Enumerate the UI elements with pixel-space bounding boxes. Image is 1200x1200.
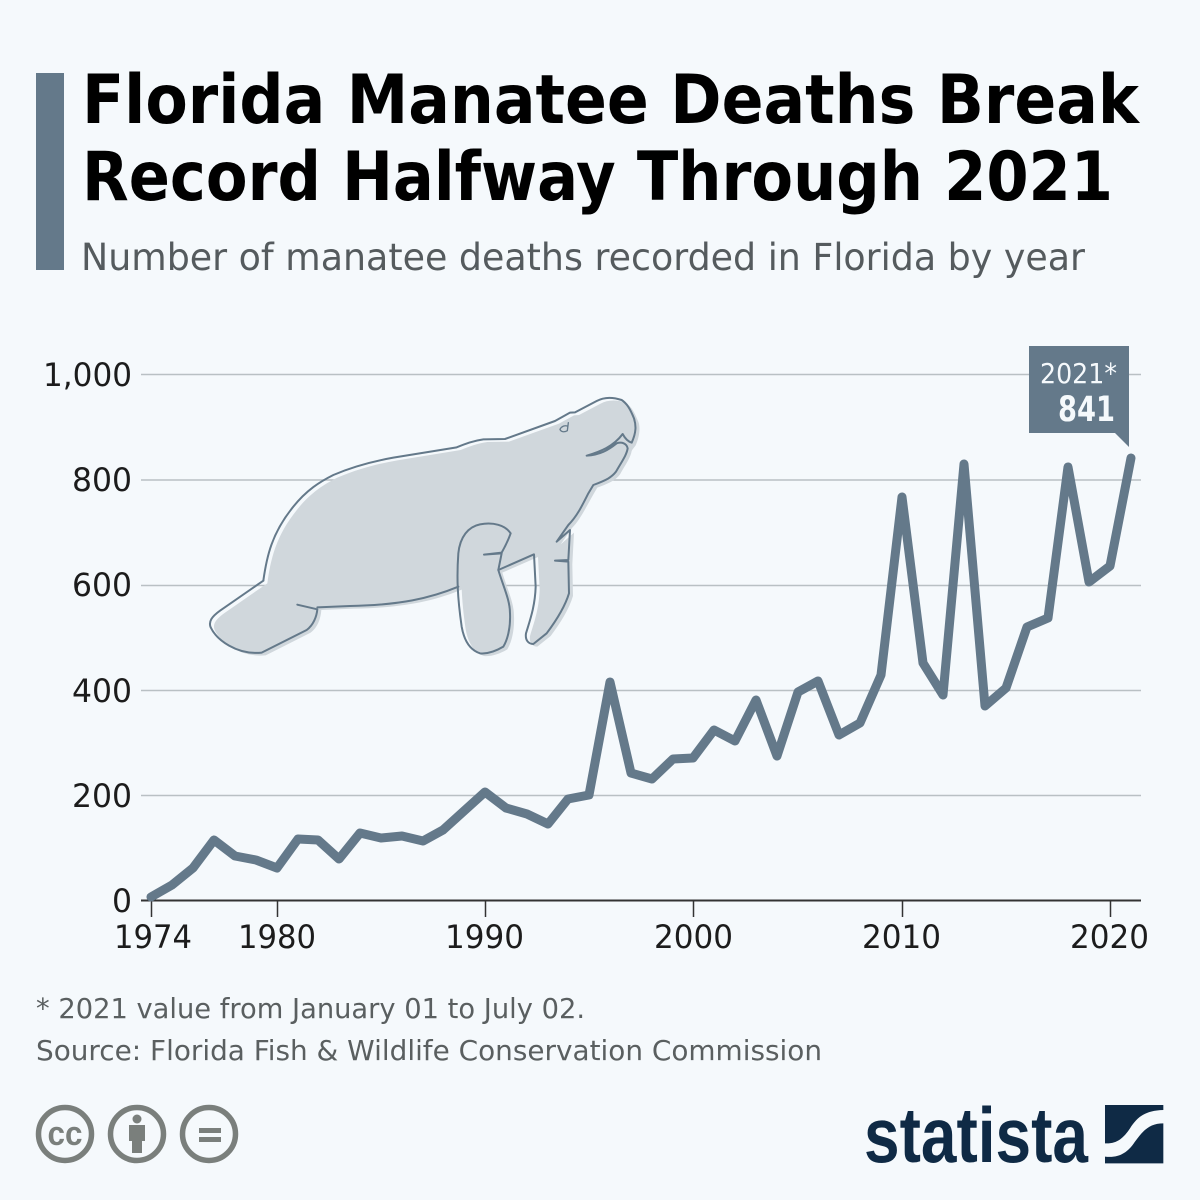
x axis labels: 2000: [654, 918, 733, 956]
y axis labels: 400: [72, 672, 132, 710]
callout: 2021 value: [1029, 346, 1129, 447]
callout: 2021 value: 841: [1058, 390, 1115, 430]
y axis labels: 800: [72, 461, 132, 499]
icon: creative commons licence: [38, 1108, 236, 1160]
footnote and source: Source: Florida Fish & Wildlife Conservation Commission: [36, 1034, 822, 1067]
line chart: [43, 346, 1149, 956]
y axis labels: 200: [72, 777, 132, 815]
y axis labels: 0: [112, 882, 132, 920]
x axis labels: 1974: [114, 918, 192, 956]
statista logo: statista: [864, 1091, 1088, 1179]
x axis labels: 1990: [445, 918, 524, 956]
subtitle: Number of manatee deaths recorded in Florida by year: [81, 236, 1086, 279]
x axis labels: 2020: [1070, 918, 1149, 956]
data line: manatee deaths by year: [151, 458, 1131, 897]
gridlines: [141, 374, 1141, 796]
y axis labels: 600: [72, 566, 132, 604]
y axis labels: 1,000: [43, 356, 132, 394]
y axis labels: [43, 356, 132, 920]
callout: 2021 value: 2021*: [1040, 357, 1117, 390]
header accent bar: [36, 73, 64, 270]
x axis labels: [114, 918, 1149, 956]
footnote and source: [36, 992, 822, 1067]
x axis with ticks: [141, 900, 1141, 917]
title: [82, 61, 1141, 217]
x axis labels: 2010: [862, 918, 941, 956]
icon: creative commons licence: cc: [48, 1115, 82, 1153]
icon: manatee illustration: [210, 398, 639, 656]
footnote and source: * 2021 value from January 01 to July 02.: [36, 992, 585, 1025]
x axis labels: 1980: [238, 918, 316, 956]
